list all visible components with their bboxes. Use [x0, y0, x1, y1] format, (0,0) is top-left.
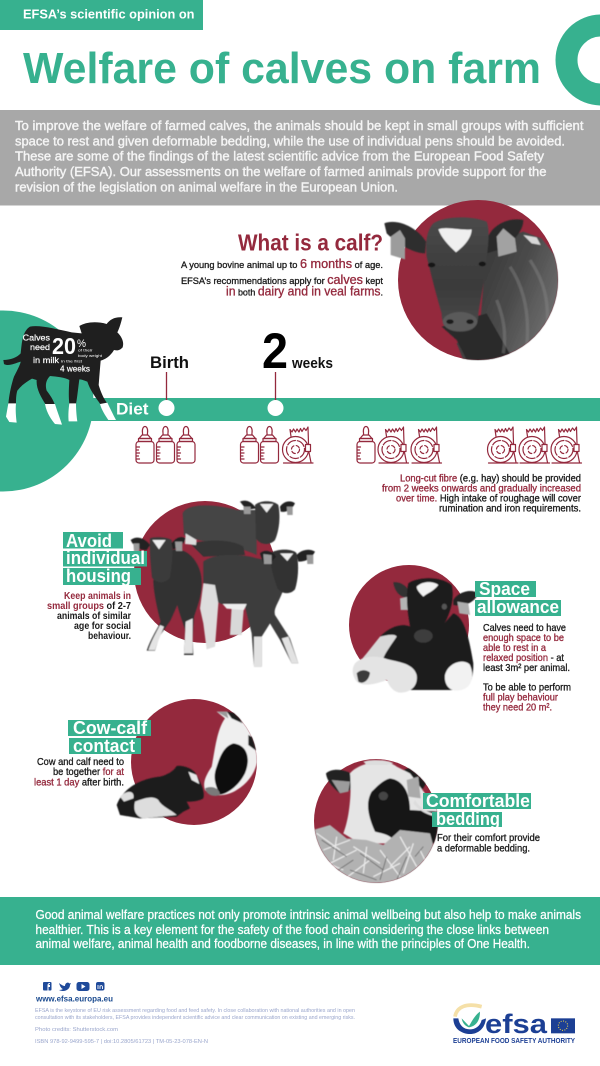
heading: comfortable bedding [423, 791, 531, 829]
logo: EFSA: EUROPEAN FOOD SAFETY AUTHORITY [453, 1036, 575, 1045]
heading: cow-calf contact [68, 718, 151, 756]
heading: cow-calf contact: Cow-calf [73, 718, 148, 738]
icon: calf silhouette with milk fact: of their [78, 348, 93, 353]
icons: two bottles and bale [240, 426, 313, 463]
heading: cow-calf contact: contact [73, 736, 135, 756]
icons: three bottles [136, 426, 195, 463]
intro panel: These are some of the findings of the latest scientific advice from the European Food Safety [15, 150, 545, 164]
text: together for at least 1 day: least 1 day after birth. [34, 777, 124, 789]
icon: calf silhouette with milk fact: need [30, 342, 50, 352]
panel: one health conclusion: Good animal welfare practices not only promote intrinsic animal wellbeing but also help to make animals [36, 908, 581, 922]
text: deformable bedding: a deformable bedding. [437, 843, 530, 855]
header tab [0, 0, 203, 30]
milestone: 2 weeks: 2 [262, 323, 288, 379]
panel: space allowance [349, 565, 571, 714]
text: long-cut fibre: rumination and iron requirements. [439, 504, 581, 515]
text: space requirements [483, 622, 571, 714]
heading: space allowance: Space [479, 579, 530, 599]
text: long-cut fibre: over time. High intake of roughage will cover [396, 494, 582, 505]
intro panel: revision of the legislation on animal welfare in the European Union. [15, 181, 398, 195]
panel: one health conclusion: healthier. This is a key element for the safety of the food chain considering the close links between [36, 923, 549, 937]
heading: avoid individual housing: Avoid [66, 531, 112, 551]
title: Welfare of calves on farm [23, 44, 541, 93]
panel: one health conclusion: animal welfare, animal health and foodborne diseases, in line with the principles of One Health. [36, 937, 530, 951]
heading: comfortable bedding: Comfortable [426, 791, 530, 811]
intro panel [0, 110, 600, 206]
header tab: EFSA’s scientific opinion on [23, 6, 195, 22]
footer [35, 982, 575, 1045]
milestone: birth [150, 353, 189, 416]
photo: lying calf in crimson circle [349, 565, 478, 693]
text: long-cut fibre: from 2 weeks onwards and gradually increased [382, 484, 581, 495]
text: calf definition [181, 256, 383, 299]
text: space requirements: they need 20 m². [483, 702, 552, 714]
icon: calf silhouette with milk fact: body weight [78, 353, 103, 358]
text: keep animals in small groups: behaviour. [88, 630, 131, 642]
panel: cow-calf contact [34, 699, 258, 825]
milestone: 2 weeks [262, 323, 333, 416]
icon: calf silhouette with milk fact: 4 weeks [60, 364, 90, 374]
photo: calf on straw in crimson circle [313, 759, 443, 883]
icon: calf silhouette with milk fact: Calves [23, 333, 50, 343]
panel: what is a calf [181, 200, 563, 360]
diet bar [0, 398, 600, 421]
milestone: 2 weeks: weeks [291, 355, 333, 372]
icon: calf silhouette with milk fact: in milk [33, 355, 60, 365]
text: together for at least 1 day [34, 756, 124, 789]
text: long-cut fibre: Long-cut fibre (e.g. hay) should be provided [400, 474, 581, 485]
icons: social media [43, 982, 104, 991]
panel: diet timeline [0, 310, 600, 515]
text: space requirements: Calves need to have [483, 622, 566, 634]
text: keep animals in small groups: small groups of 2-7 [47, 600, 131, 612]
intro panel: space to rest and given deformable bedding, while the use of individual pens should be avoided. [15, 134, 565, 148]
decorative ring [566, 26, 600, 94]
text: together for at least 1 day: be together for at [53, 766, 124, 778]
photo: cow and calf in crimson circle [117, 699, 258, 825]
text: together for at least 1 day: Cow and calf need to [37, 756, 124, 768]
heading: avoid individual housing: individual [66, 548, 145, 568]
text: keep animals in small groups: age for social [74, 620, 131, 632]
heading: avoid individual housing: housing [66, 566, 131, 586]
icon: calf silhouette with milk fact: 20 [52, 333, 76, 359]
icon: calf silhouette with milk fact [3, 317, 123, 425]
heading: space allowance: allowance [477, 597, 559, 617]
panel: comfortable bedding [313, 759, 540, 883]
milestone: birth: Birth [150, 353, 189, 372]
label: diet: Diet [116, 400, 149, 418]
text: space requirements: able to rest in a [483, 642, 546, 654]
text: space requirements: To be able to perform [483, 682, 571, 694]
text: deformable bedding [437, 832, 540, 855]
text: about EFSA and credits [35, 1008, 355, 1045]
text: calf definition: A young bovine animal up to 6 months of age. [181, 256, 383, 271]
text: calf definition: EFSA’s recommendations apply for calves kept [181, 272, 383, 287]
text: deformable bedding: For their comfort provide [437, 832, 540, 844]
heading: avoid individual housing [63, 531, 147, 586]
heading: what is a calf: What is a calf? [238, 230, 383, 256]
text: keep animals in small groups [47, 590, 131, 642]
text: about EFSA and credits: Photo credits: Shutterstock.com [35, 1027, 118, 1033]
icon: calf silhouette with milk fact: in the first [61, 359, 83, 364]
intro panel: Authority (EFSA). Our assessments on the welfare of farmed animals provide support for the [15, 165, 547, 179]
icons: bottle and two bales [357, 426, 442, 463]
text: space requirements: relaxed position - at [483, 652, 564, 664]
panel: one health conclusion [0, 897, 600, 965]
icon: calf silhouette with milk fact: % [77, 338, 86, 350]
heading: comfortable bedding: bedding [436, 809, 500, 829]
text: calf definition: in both dairy and in veal farms. [226, 284, 383, 299]
photo: calf portrait in crimson circle [384, 200, 563, 360]
intro panel: To improve the welfare of farmed calves, the animals should be kept in small groups with sufficient [15, 119, 584, 133]
text: space requirements: least 3m² per animal. [483, 662, 570, 674]
photo: group of calves in crimson circle [131, 501, 315, 667]
website: www.efsa.europa.eu [35, 994, 113, 1004]
icons: three bales [488, 427, 582, 463]
green half circle [0, 310, 94, 492]
text: about EFSA and credits: ISBN 978-92-9499-595-7 | doi:10.2805/61723 | TM-05-23-078-EN-N [35, 1039, 208, 1045]
text: space requirements: enough space to be [483, 632, 564, 644]
text: keep animals in small groups: animals of similar [57, 610, 131, 622]
logo: EFSA: efsa [485, 1009, 548, 1039]
text: space requirements: full play behaviour [483, 692, 558, 704]
heading: space allowance [475, 579, 561, 617]
text: keep animals in small groups: Keep animals in [64, 590, 131, 602]
text: long-cut fibre [382, 474, 582, 515]
logo: EFSA [453, 1005, 575, 1045]
panel: avoid individual housing [47, 501, 315, 667]
text: about EFSA and credits: EFSA is the keystone of EU risk assessment regarding food and feed safety. In close collaboration with national authorities and in open [35, 1008, 355, 1014]
text: about EFSA and credits: consultation with its stakeholders, EFSA provides independent scientific advice and clear communication on existing and emerging risks. [35, 1015, 355, 1021]
